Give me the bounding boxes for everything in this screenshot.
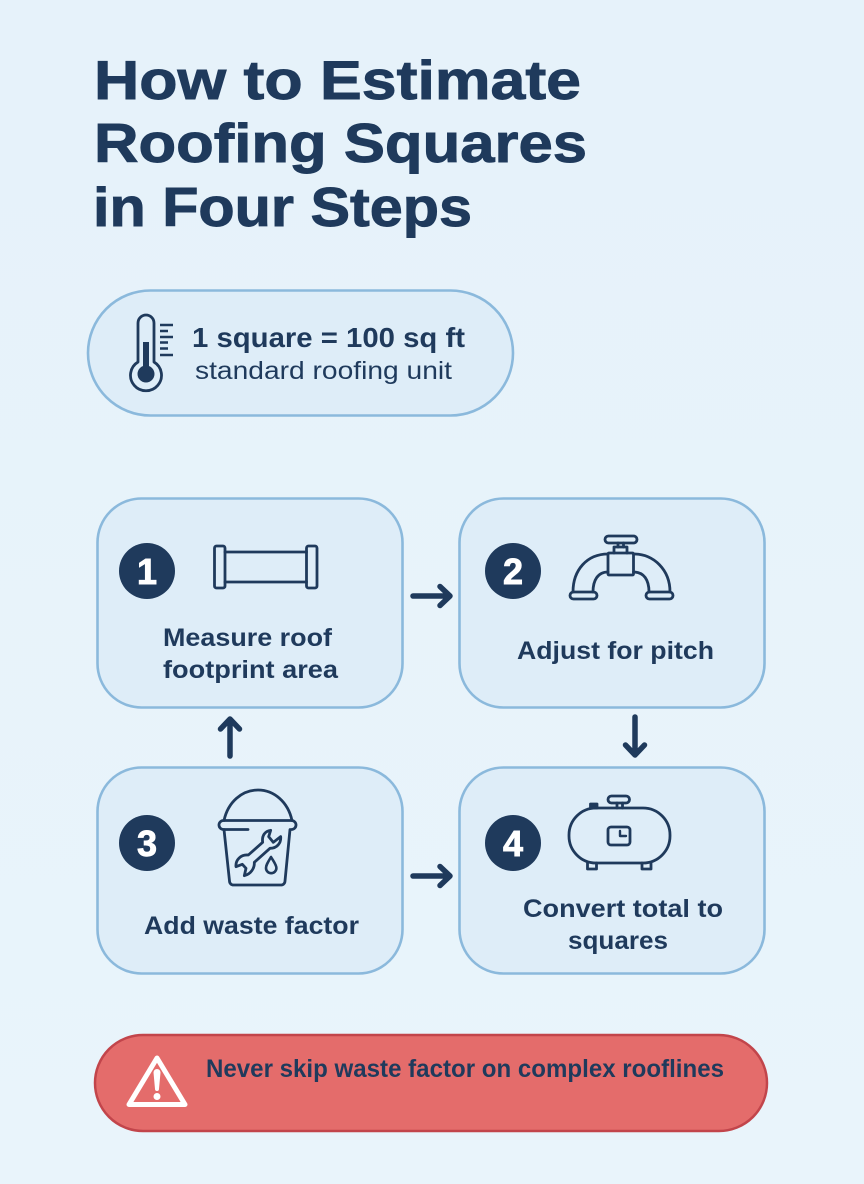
icon: pipe [214,546,317,588]
step number 2 [485,543,541,599]
panel: step 4 [460,768,764,974]
step 1 label [163,624,339,684]
unit headline: 1 square = 100 sq ft [192,322,465,353]
unit caption: standard roofing unit [195,357,452,385]
title: How to Estimate [94,49,581,111]
icon: valve pipe [570,536,673,599]
panel: step 2 [460,498,764,708]
step number 3 [119,815,175,871]
step number 2: 2 [503,551,523,592]
step number 4: 4 [503,823,523,864]
step 2 label: Adjust for pitch [517,637,714,665]
step 1 label: Measure roof [163,624,333,652]
arrow: step 3 to step 4 [413,866,450,886]
warning banner [95,1035,767,1131]
icon: bucket with wrench [219,790,296,885]
step number 3: 3 [137,823,157,864]
title [93,49,587,238]
step 4 label: squares [568,927,668,955]
title: in Four Steps [93,176,472,238]
icon: thermometer [131,315,173,391]
icon: warning triangle [129,1058,185,1104]
step 3 label: Add waste factor [144,912,359,940]
step 4 label: Convert total to [523,895,723,923]
wrench [236,830,281,876]
title: Roofing Squares [94,112,587,174]
step 4 label [523,895,723,955]
icon: tank [569,796,670,869]
step number 4 [485,815,541,871]
step number 1 [119,543,175,599]
panel: step 1 [98,498,402,708]
step 1 label: footprint area [163,656,339,684]
arrow: step 2 to step 4 [626,717,644,755]
step number 1: 1 [137,551,157,592]
arrow: step 1 to step 2 [413,586,450,606]
warning text: Never skip waste factor on complex rooflines [206,1055,724,1083]
panel: unit definition [88,290,513,416]
water drop [266,857,276,873]
panel: step 3 [98,768,402,974]
arrow: step 3 to step 1 [220,719,240,756]
